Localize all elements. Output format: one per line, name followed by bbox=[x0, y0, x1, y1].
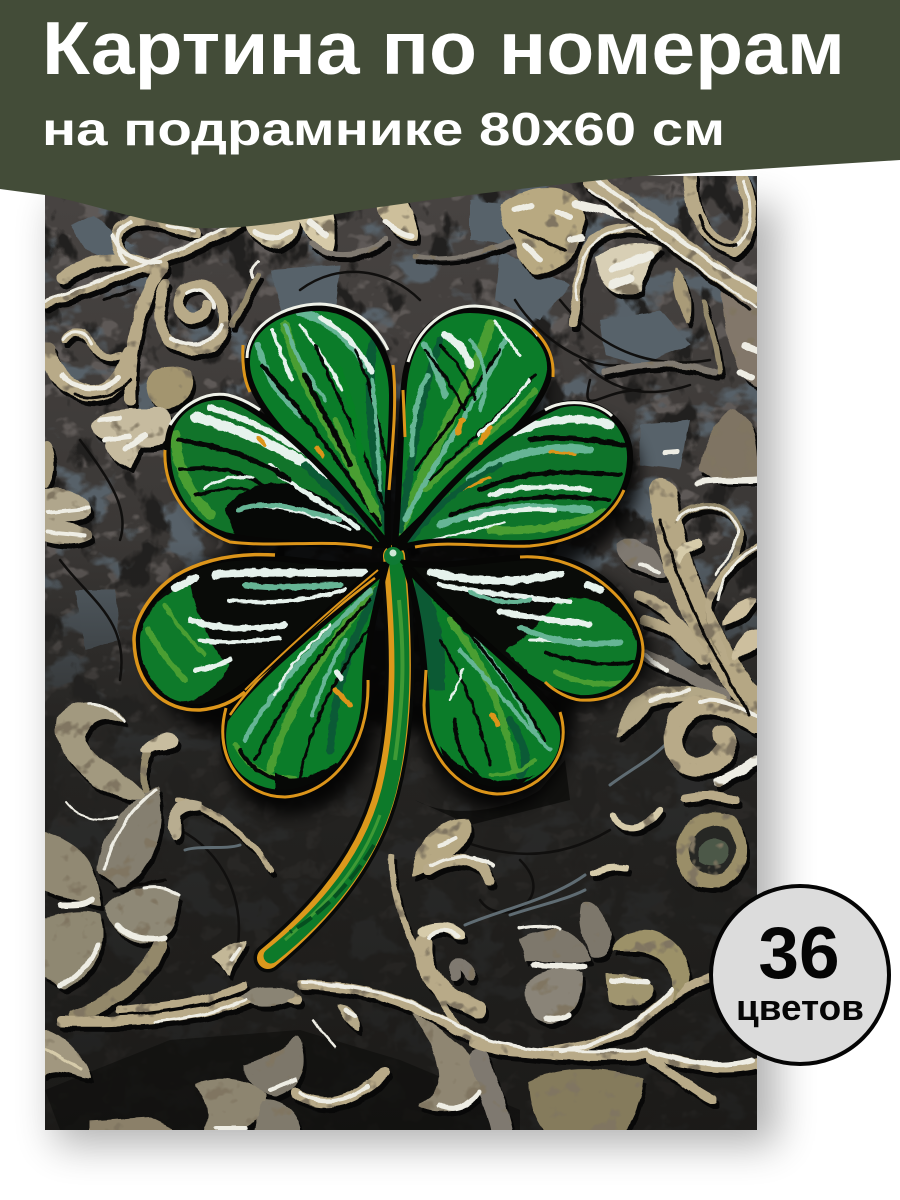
ornament: bottom-left flower and scrolls bbox=[45, 703, 385, 1130]
badge: colour count bbox=[711, 886, 889, 1064]
ornament: top centre petals bbox=[245, 200, 417, 255]
clover leaf: upper-right top lobe bbox=[395, 306, 553, 545]
clover leaf: lower-left lower lobe bbox=[223, 570, 385, 797]
clover leaf: upper-left lower lobe bbox=[165, 394, 385, 548]
clover centre bbox=[384, 547, 402, 565]
ornament: top-right flower and bands bbox=[415, 176, 757, 480]
top banner bbox=[0, 0, 900, 228]
badge: colour count: 36 bbox=[758, 913, 840, 994]
painted background texture bbox=[45, 176, 757, 1130]
subtitle: на подрамнике 80х60 см bbox=[42, 103, 725, 155]
clover leaf: upper-right lower lobe bbox=[400, 403, 630, 548]
clover leaf: lower-left upper lobe bbox=[134, 555, 382, 710]
ornament shapes bbox=[45, 176, 757, 1135]
badge: colour count: цветов bbox=[736, 987, 864, 1028]
clover leaf: lower-right upper lobe bbox=[405, 557, 643, 700]
ornament: right leaf scrolls bbox=[593, 479, 757, 887]
stem bbox=[268, 556, 402, 958]
title: Картина по номерам bbox=[42, 6, 845, 90]
ornament highlights bbox=[45, 176, 757, 1128]
clover leaf: upper-left top lobe bbox=[243, 304, 395, 545]
clover shadow bbox=[150, 320, 650, 815]
ornament: bottom-right flower and swoosh bbox=[302, 820, 757, 1135]
canvas shadow bbox=[55, 205, 777, 1145]
ornament: top-left scrolls and spiral bbox=[45, 219, 258, 543]
painting canvas bbox=[45, 176, 757, 1135]
clover leaf: lower-right lower lobe bbox=[405, 565, 563, 797]
